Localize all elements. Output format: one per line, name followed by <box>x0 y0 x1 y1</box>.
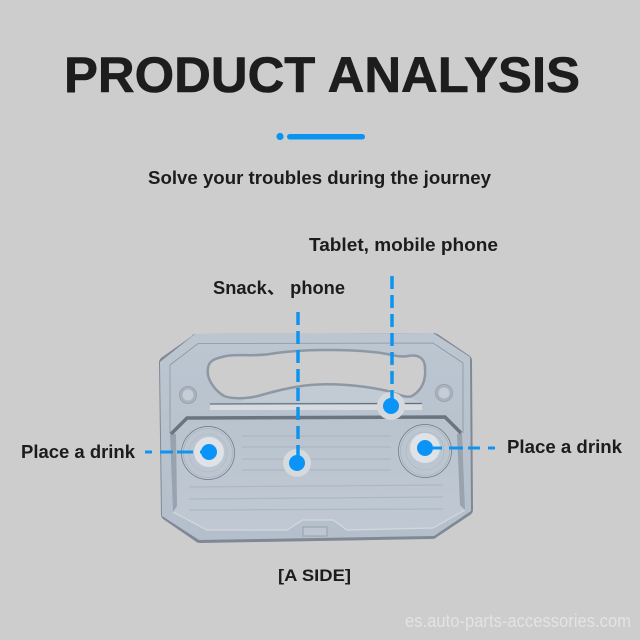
left cup holder <box>182 426 234 480</box>
well right wall <box>457 433 465 510</box>
well top wall <box>171 417 461 434</box>
product: tray <box>159 333 473 543</box>
label: left drink: Place a drink <box>21 442 136 462</box>
screw hole right <box>436 384 452 402</box>
tablet slot <box>210 404 422 410</box>
handle opening <box>208 350 425 398</box>
well left wall <box>170 433 177 512</box>
marker: left drink <box>145 437 224 467</box>
label: tablet, mobile phone: Tablet, mobile phone <box>309 235 498 255</box>
label: right drink: Place a drink <box>507 437 623 457</box>
tab notch <box>303 527 327 536</box>
label: snack, phone: Snack、 phone <box>213 278 345 298</box>
marker: snack, phone <box>283 312 311 477</box>
tray outer shell <box>159 333 473 543</box>
title: PRODUCT ANALYSIS <box>64 47 580 103</box>
caption: [A SIDE] <box>278 567 351 585</box>
raised panel behind slot <box>240 384 420 402</box>
well bottom lip <box>173 510 465 530</box>
marker: tablet, mobile phone <box>377 276 405 420</box>
ribs <box>189 436 443 510</box>
screw hole left <box>180 386 196 404</box>
inner rim line <box>170 343 463 433</box>
marker: right drink <box>410 433 495 463</box>
accent bar <box>276 133 365 140</box>
right cup holder <box>398 424 452 478</box>
subtitle: Solve your troubles during the journey <box>148 168 491 188</box>
tray well <box>170 417 465 530</box>
